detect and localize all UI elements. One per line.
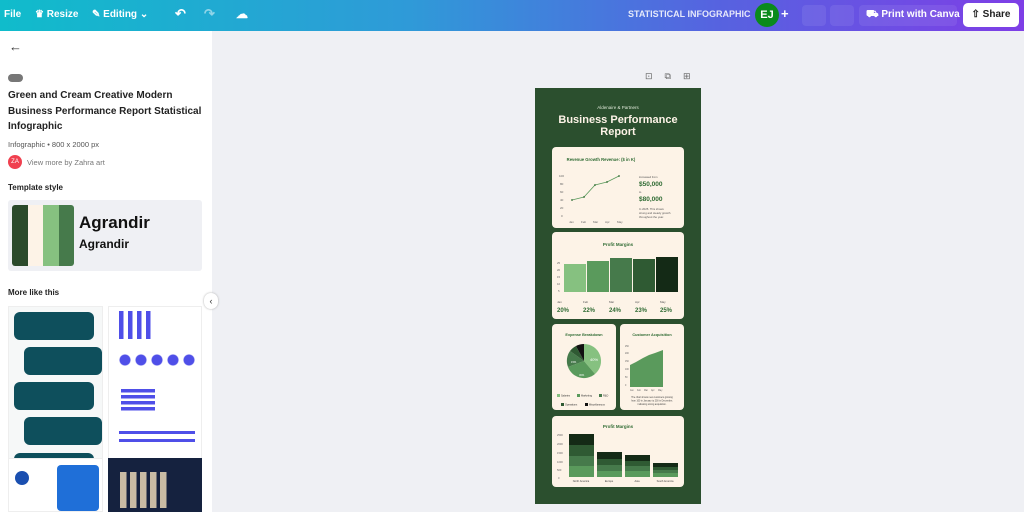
card: expense breakdown pie xyxy=(552,324,616,410)
top toolbar: EJ xyxy=(760,9,774,21)
card: profit margin bars: 25% xyxy=(660,308,673,314)
header: Report xyxy=(600,126,636,138)
card: expense breakdown pie: Miscellaneous xyxy=(589,404,606,406)
left panel: Green and Cream Creative Modern Business Performance Report Statistical Infographic xyxy=(8,90,201,132)
header: Business Performance xyxy=(558,114,678,126)
infographic xyxy=(535,88,701,504)
top toolbar: ♛ Resize xyxy=(35,9,78,20)
card: profit margin bars: 15 xyxy=(557,275,561,279)
card: customer acquisition: May xyxy=(658,390,663,392)
card: profit margin bars: 25 xyxy=(557,261,561,265)
card: revenue growth: $50,000 xyxy=(639,181,663,188)
card: profit margin bars xyxy=(552,232,684,319)
card: customer acquisition: Customer Acquisition xyxy=(632,333,672,337)
card: expense breakdown pie: 40% xyxy=(590,357,598,362)
card: profit margin bars: May xyxy=(660,300,666,304)
card: expense breakdown pie: Operations xyxy=(565,404,578,406)
card: profit margin bars: Mar xyxy=(609,300,614,304)
card: revenue growth xyxy=(552,147,684,228)
card: customer acquisition: Mar xyxy=(644,389,648,392)
top toolbar: ↷ xyxy=(204,6,215,21)
top toolbar: + xyxy=(781,6,789,21)
card: expense breakdown pie: 15% xyxy=(571,360,577,364)
top toolbar xyxy=(0,0,1024,31)
card: customer acquisition: indicating strong acquisition. xyxy=(638,403,667,406)
card: customer acquisition: 250 xyxy=(625,346,630,348)
card: profit margin bars: Jan xyxy=(557,300,562,304)
card: expense breakdown pie: R&D xyxy=(603,394,608,398)
card: revenue growth: In 2025. This shows xyxy=(639,207,664,211)
card: revenue growth: throughout the year. xyxy=(639,215,664,219)
left panel xyxy=(0,31,212,512)
left panel: More like this xyxy=(8,288,59,297)
card: revenue growth: 40 xyxy=(560,198,564,202)
left panel: ← xyxy=(9,39,22,54)
card: revenue growth: to xyxy=(639,190,642,194)
card: expense breakdown pie: Marketing xyxy=(581,394,593,398)
left panel: Template style xyxy=(8,183,63,192)
top toolbar: ✎ Editing ⌄ xyxy=(92,9,148,20)
card: revenue growth: 100 xyxy=(559,174,564,178)
left panel: View more by Zahra art xyxy=(27,158,105,167)
card: profit margin bars: 20 xyxy=(557,268,561,272)
card: revenue growth: Apr xyxy=(605,220,610,224)
top toolbar: STATISTICAL INFOGRAPHIC xyxy=(628,9,750,19)
card: profit margin bars: Profit Margins xyxy=(603,242,634,247)
card: profit margin bars: 22% xyxy=(583,308,596,314)
card: stacked bars: 1500 xyxy=(557,451,563,455)
card: customer acquisition: 200 xyxy=(625,353,630,355)
card: profit margin bars: 10 xyxy=(557,282,561,286)
left panel: Infographic • 800 x 2000 px xyxy=(8,140,99,149)
card: profit margin bars: 20% xyxy=(557,308,570,314)
card: revenue growth: Mar xyxy=(593,220,598,224)
card: stacked bars: 500 xyxy=(557,468,562,472)
card: stacked bars: Profit Margins xyxy=(603,424,634,429)
card: stacked bars: 2000 xyxy=(557,442,563,446)
card: stacked bars: 0 xyxy=(558,476,560,480)
card: revenue growth: 0 xyxy=(561,214,563,218)
card: stacked bars: 2500 xyxy=(557,433,563,437)
card: profit margin bars: 24% xyxy=(609,308,622,314)
card: stacked bars: Asia xyxy=(634,479,640,483)
header: Aldenaire & Partners xyxy=(597,105,640,110)
card: profit margin bars: 5 xyxy=(558,289,560,293)
top toolbar: ⛟ Print with Canva xyxy=(866,9,960,20)
card: customer acquisition: 150 xyxy=(625,361,630,363)
header xyxy=(558,105,678,138)
canvas icons: ⊡⧉⊞ xyxy=(645,71,703,81)
card: customer acquisition: The chart shows new customers growing xyxy=(631,396,674,399)
left panel: ZA xyxy=(11,159,19,165)
card: stacked bars xyxy=(552,416,684,487)
top toolbar: ↶ xyxy=(175,6,186,21)
card: stacked bars: Europe xyxy=(605,479,614,483)
card: revenue growth: 60 xyxy=(560,190,564,194)
card: revenue growth: Revenue Growth Revenue: ($ in K) xyxy=(567,157,636,162)
card: stacked bars: 1000 xyxy=(557,460,563,464)
top toolbar: ⇧ Share xyxy=(972,9,1010,20)
top toolbar: ☁ xyxy=(236,7,248,21)
card: customer acquisition: 50 xyxy=(625,377,628,379)
card: customer acquisition: Apr xyxy=(651,389,655,392)
card: revenue growth: 80 xyxy=(560,182,564,186)
card: profit margin bars: Feb xyxy=(583,300,589,304)
card: expense breakdown pie: Expense Breakdown xyxy=(565,333,603,337)
card: customer acquisition: Jan xyxy=(630,390,634,392)
card: revenue growth: May xyxy=(617,220,623,224)
card: stacked bars: South America xyxy=(657,479,674,483)
card: profit margin bars: 23% xyxy=(635,308,648,314)
thumbnails xyxy=(8,306,103,478)
card: revenue growth: Jan xyxy=(569,220,574,224)
card: expense breakdown pie: Salaries xyxy=(561,394,571,398)
card: stacked bars: North America xyxy=(573,479,590,483)
card: profit margin bars: Apr xyxy=(635,300,640,304)
card: customer acquisition: 100 xyxy=(625,369,630,371)
card: customer acquisition: Feb xyxy=(637,390,642,392)
left panel: Agrandir xyxy=(79,237,129,251)
card: customer acquisition: 0 xyxy=(625,385,627,387)
card: customer acquisition xyxy=(620,324,684,410)
card: revenue growth: 20 xyxy=(560,206,564,210)
left panel: Agrandir xyxy=(79,213,150,232)
card: customer acquisition: from 100 in January to 200 in December, xyxy=(631,400,673,402)
card: revenue growth: strong and steady growth xyxy=(639,211,671,215)
card: revenue growth: increased from xyxy=(639,175,658,179)
card: expense breakdown pie: 30% xyxy=(579,373,585,377)
left panel: ‹ xyxy=(210,296,212,306)
card: revenue growth: Feb xyxy=(581,220,587,224)
top toolbar: File xyxy=(4,9,21,20)
card: revenue growth: $80,000 xyxy=(639,196,663,203)
